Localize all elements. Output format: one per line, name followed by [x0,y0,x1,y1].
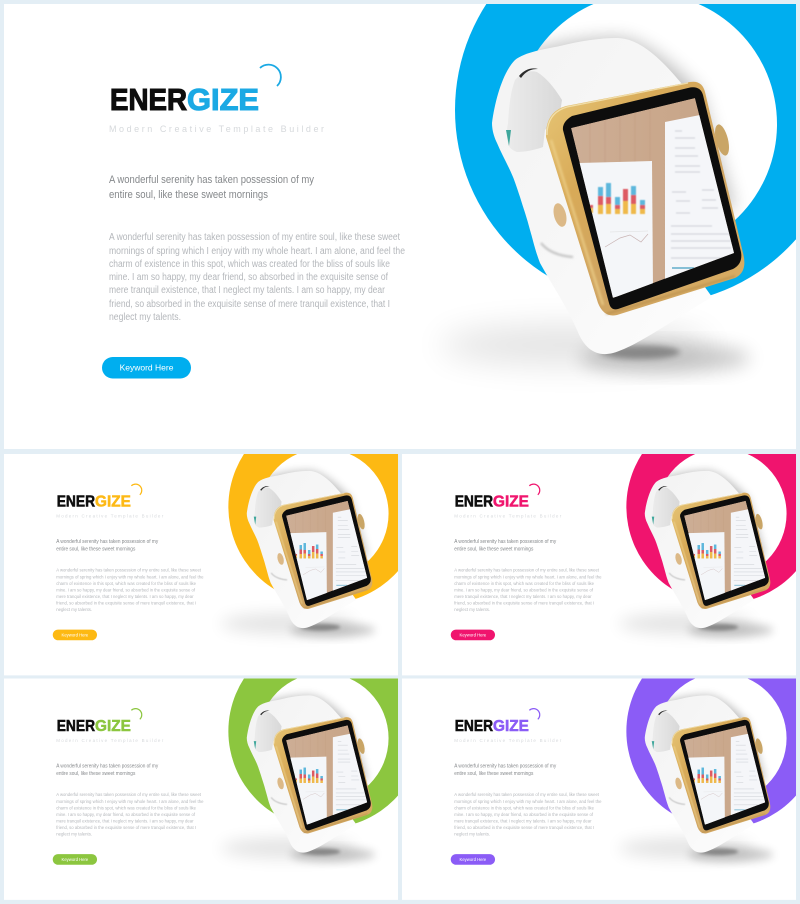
subtitle: Modern Creative Template Builder [454,514,562,519]
body text [454,567,602,613]
logo: ENER [57,494,95,511]
logo [57,494,131,511]
body text: A wonderful serenity has taken possession of my entire soul, like these sweet [454,792,600,798]
lead text: A wonderful serenity has taken possession of my [454,764,556,770]
lead text [454,764,556,777]
panel: green slide [4,678,398,900]
logo arc [131,709,142,719]
subtitle: Modern Creative Template Builder [56,738,164,743]
lead text: entire soul, like these sweet mornings [56,771,136,777]
lead text: entire soul, like these sweet mornings [56,547,136,553]
lead text: A wonderful serenity has taken possession of my [109,174,314,186]
logo: ENER [455,494,493,511]
button: Keyword Here [460,857,487,862]
button: Keyword Here [62,632,89,637]
panel: purple slide [402,678,796,900]
button [451,630,495,640]
logo [455,494,529,511]
body text: friend, so absorbed in the exquisite sense of mere tranquil existence, that I [454,825,594,831]
body text [109,232,405,323]
body text: friend, so absorbed in the exquisite sense of mere tranquil existence, that I [454,601,594,607]
logo: GIZE [95,718,131,735]
button [102,357,191,378]
logo: ENER [455,718,493,735]
logo: GIZE [493,494,529,511]
body text: charm of existence in this spot, which was created for the bliss of souls like [56,581,196,587]
button: Keyword Here [460,632,487,637]
blue ring and watch [440,0,800,373]
lead text: A wonderful serenity has taken possession of my [56,539,158,545]
body text: friend, so absorbed in the exquisite sense of mere tranquil existence, that I [56,601,196,607]
yellow ring and watch [226,454,398,642]
body text: neglect my talents. [109,312,181,323]
body text: charm of existence in this spot, which was created for the bliss of souls like [454,805,594,811]
body text [56,567,204,613]
subtitle: Modern Creative Template Builder [56,514,164,519]
logo: ENER [57,718,95,735]
button: Keyword Here [120,362,174,372]
logo arc [260,65,281,86]
button [53,630,97,640]
panel: pink slide [402,454,796,676]
body text: friend, so absorbed in the exquisite sense of mere tranquil existence, that I [109,299,390,310]
body text: neglect my talents. [56,832,92,838]
lead text: entire soul, like these sweet mornings [454,547,534,553]
body text: neglect my talents. [454,832,490,838]
logo: GIZE [95,494,131,511]
logo: ENER [110,82,187,117]
panel: yellow slide [4,454,398,676]
lead text [109,174,314,201]
body text [56,792,204,838]
body text: charm of existence in this spot, which was created for the bliss of souls like [56,805,196,811]
purple ring and watch [624,678,796,867]
body text: mere tranquil existence, that I neglect my talents. I am so happy, my dear [56,818,194,824]
lead text: A wonderful serenity has taken possession of my [454,539,556,545]
pink ring and watch [624,454,796,642]
logo [57,718,131,735]
body text: mere tranquil existence, that I neglect my talents. I am so happy, my dear [454,594,592,600]
body text: mornings of spring which I enjoy with my whole heart. I am alone, and feel the [454,799,602,805]
logo arc [131,484,142,495]
logo arc [529,484,540,495]
lead text [56,764,158,777]
subtitle: Modern Creative Template Builder [109,124,324,134]
body text: mere tranquil existence, that I neglect my talents. I am so happy, my dear [56,594,194,600]
lead text: A wonderful serenity has taken possession of my [56,764,158,770]
lead text: entire soul, like these sweet mornings [454,771,534,777]
body text: charm of existence in this spot, which was created for the bliss of souls like [109,259,390,270]
body text: mornings of spring which I enjoy with my whole heart. I am alone, and feel the [56,799,204,805]
logo [455,718,529,735]
body text: mere tranquil existence, that I neglect my talents. I am so happy, my dear [109,285,386,296]
body text: mine. I am so happy, my dear friend, so absorbed in the exquisite sense of [454,812,594,818]
button: Keyword Here [62,857,89,862]
body text: charm of existence in this spot, which was created for the bliss of souls like [454,581,594,587]
body text: A wonderful serenity has taken possession of my entire soul, like these sweet [56,567,202,573]
body text: mine. I am so happy, my dear friend, so absorbed in the exquisite sense of [56,812,196,818]
green ring and watch [226,678,398,867]
lead text: entire soul, like these sweet mornings [109,189,268,201]
body text: neglect my talents. [56,607,92,613]
body text: mornings of spring which I enjoy with my whole heart. I am alone, and feel the [56,574,204,580]
button [451,854,495,865]
body text: A wonderful serenity has taken possession of my entire soul, like these sweet [454,567,600,573]
logo arc [529,709,540,719]
body text: mere tranquil existence, that I neglect my talents. I am so happy, my dear [454,818,592,824]
lead text [56,539,158,553]
button [53,854,97,865]
logo: GIZE [493,718,529,735]
body text: mornings of spring which I enjoy with my whole heart. I am alone, and feel the [454,574,602,580]
body text: friend, so absorbed in the exquisite sense of mere tranquil existence, that I [56,825,196,831]
lead text [454,539,556,553]
body text: mornings of spring which I enjoy with my whole heart. I am alone, and feel the [109,246,405,257]
panel: main blue slide [4,0,800,449]
body text: neglect my talents. [454,607,490,613]
subtitle: Modern Creative Template Builder [454,738,562,743]
body text: mine. I am so happy, my dear friend, so absorbed in the exquisite sense of [109,272,388,283]
body text: mine. I am so happy, my dear friend, so absorbed in the exquisite sense of [454,587,594,593]
body text: A wonderful serenity has taken possession of my entire soul, like these sweet [56,792,202,798]
body text: mine. I am so happy, my dear friend, so absorbed in the exquisite sense of [56,587,196,593]
logo: GIZE [187,82,259,117]
body text [454,792,602,838]
logo [110,82,259,117]
body text: A wonderful serenity has taken possession of my entire soul, like these sweet [109,232,400,243]
